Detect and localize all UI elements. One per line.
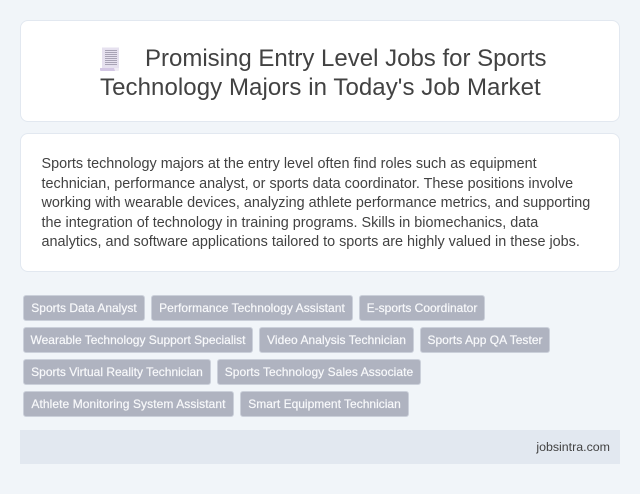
tag <box>240 391 409 417</box>
tag <box>420 327 550 353</box>
tag <box>23 359 211 385</box>
description text <box>42 156 590 250</box>
tag: Smart Equipment Technician <box>248 397 401 411</box>
tag: Sports Technology Sales Associate <box>225 365 413 379</box>
title panel <box>20 20 620 122</box>
tag: E-sports Coordinator <box>367 301 477 315</box>
icon: document scroll <box>100 48 119 71</box>
tag: Sports App QA Tester <box>427 333 543 347</box>
tag: Wearable Technology Support Specialist <box>30 333 246 347</box>
tag <box>359 295 485 321</box>
description text: analytics, and software applications tailored to sports are highly valued in these jobs. <box>42 234 580 250</box>
tag: Sports Data Analyst <box>31 301 137 315</box>
tag <box>23 327 253 353</box>
footer bar <box>20 430 620 464</box>
description panel <box>20 133 620 272</box>
tag: Performance Technology Assistant <box>159 301 345 315</box>
tag: Sports Virtual Reality Technician <box>31 365 203 379</box>
description text: technician, performance analyst, or sports data coordinator. These positions involve <box>42 176 573 192</box>
tag <box>217 359 421 385</box>
description text: working with wearable devices, analyzing athlete performance metrics, and supporting <box>42 195 590 211</box>
description text: the integration of technology in training programs. Skills in biomechanics, data <box>42 214 538 230</box>
description text: Sports technology majors at the entry level often find roles such as equipment <box>42 156 537 172</box>
title: Promising Entry Level Jobs for Sports <box>145 45 546 72</box>
job tags <box>23 295 550 417</box>
footer source text: jobsintra.com <box>536 440 610 454</box>
title: Technology Majors in Today's Job Market <box>100 74 541 101</box>
tag <box>23 295 145 321</box>
tag <box>23 391 234 417</box>
tag: Athlete Monitoring System Assistant <box>31 397 226 411</box>
tag <box>259 327 414 353</box>
tag: Video Analysis Technician <box>267 333 406 347</box>
title <box>100 45 546 101</box>
tag <box>151 295 353 321</box>
